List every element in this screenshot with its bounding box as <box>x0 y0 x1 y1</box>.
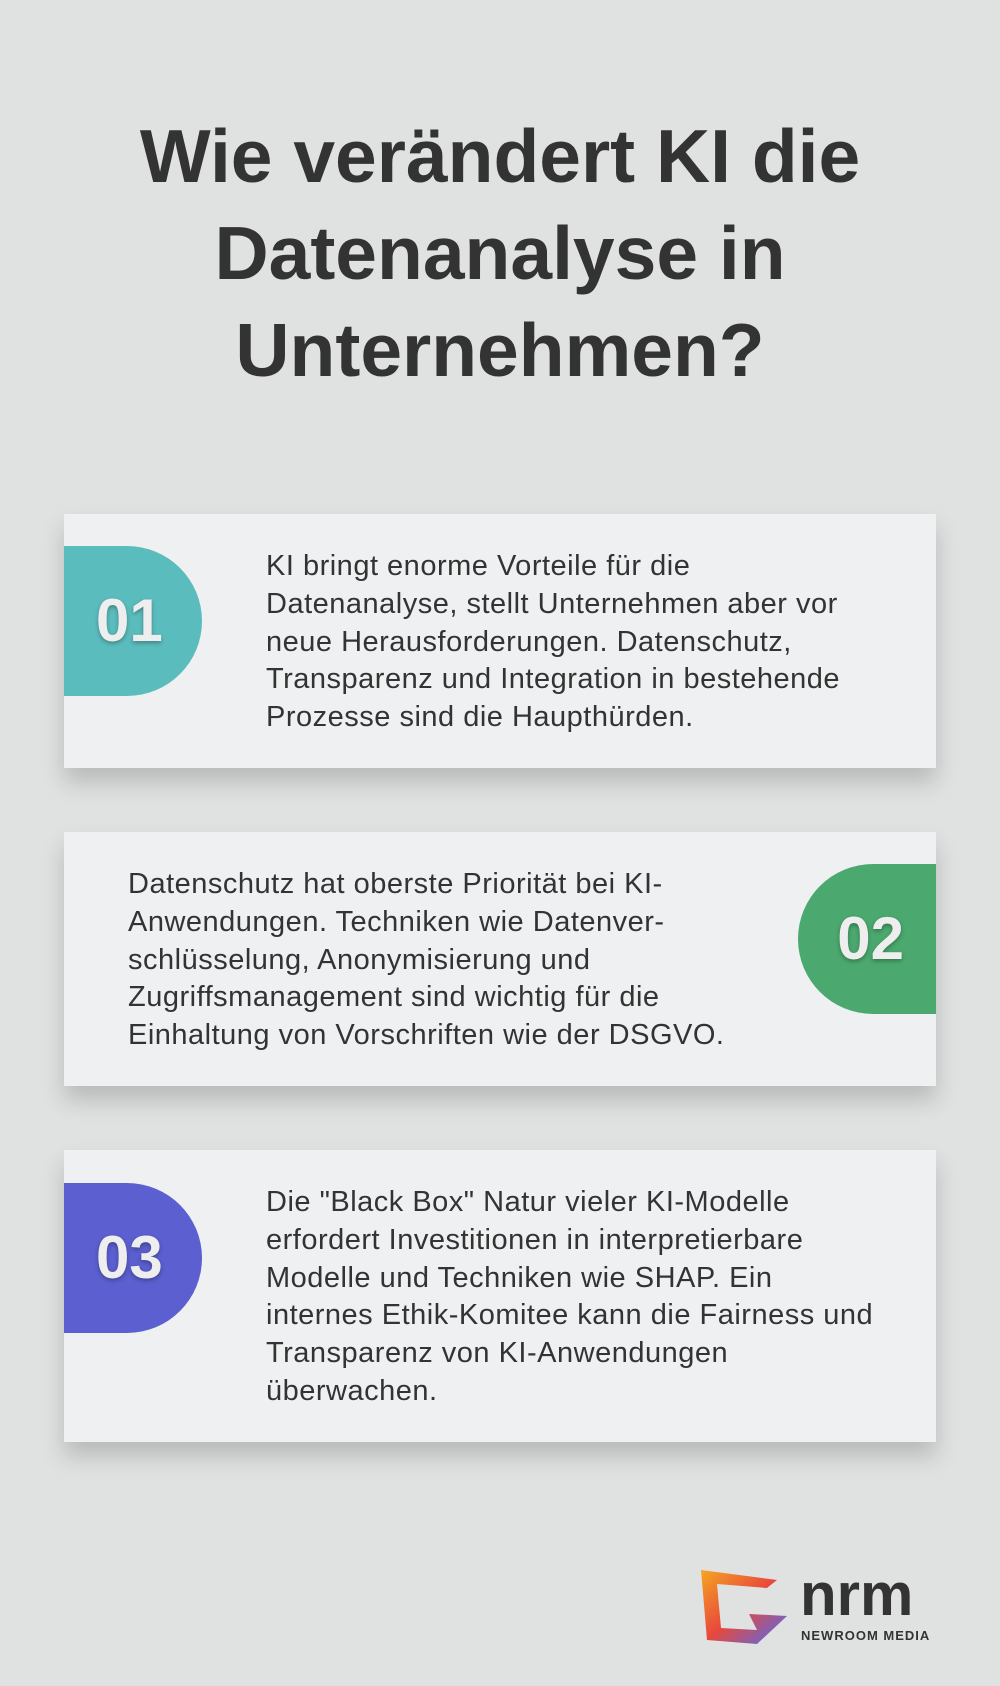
title: Unternehmen? <box>235 308 765 392</box>
text 2: Anwendungen. Techniken wie Datenver- <box>128 906 665 938</box>
badge 01 <box>64 546 202 696</box>
panel: card 3 <box>64 1150 936 1442</box>
text 3: erfordert Investitionen in interpretierbare <box>266 1224 803 1256</box>
text 3: Transparenz von KI-Anwendungen <box>266 1337 728 1369</box>
text 2: Einhaltung von Vorschriften wie der DSGVO. <box>128 1019 724 1051</box>
logo text: nrm <box>800 1561 913 1628</box>
badge 02 <box>798 864 936 1014</box>
text 2 <box>128 868 724 1051</box>
text 3: Die "Black Box" Natur vieler KI-Modelle <box>266 1186 790 1218</box>
text 2: Datenschutz hat oberste Priorität bei KI- <box>128 868 663 900</box>
text 1 <box>266 550 840 733</box>
text 1: Datenanalyse, stellt Unternehmen aber vor <box>266 588 838 620</box>
badge 02: 02 <box>837 905 904 972</box>
title: Datenanalyse in <box>214 211 786 295</box>
badge 03 <box>64 1183 202 1333</box>
logo: NEWROOM MEDIA <box>801 1628 930 1643</box>
badge 03: 03 <box>96 1224 163 1291</box>
text 1: KI bringt enorme Vorteile für die <box>266 550 690 582</box>
text 2: schlüsselung, Anonymisierung und <box>128 944 591 976</box>
logo <box>701 1561 930 1644</box>
panel: card 2 <box>64 832 936 1086</box>
panel: card 1 <box>64 514 936 768</box>
text 2: Zugriffsmanagement sind wichtig für die <box>128 981 660 1013</box>
text 1: neue Herausforderungen. Datenschutz, <box>266 626 792 658</box>
text 3: Modelle und Techniken wie SHAP. Ein <box>266 1262 773 1294</box>
icon: logo mark <box>701 1570 787 1644</box>
title: Wie verändert KI die <box>140 114 860 198</box>
text 3 <box>266 1186 873 1407</box>
text 3: internes Ethik-Komitee kann die Fairness und <box>266 1299 873 1331</box>
badge 01: 01 <box>96 587 163 654</box>
text 3: überwachen. <box>266 1375 438 1407</box>
title <box>140 114 860 392</box>
text 1: Transparenz und Integration in bestehende <box>266 663 840 695</box>
text 1: Prozesse sind die Haupthürden. <box>266 701 694 733</box>
